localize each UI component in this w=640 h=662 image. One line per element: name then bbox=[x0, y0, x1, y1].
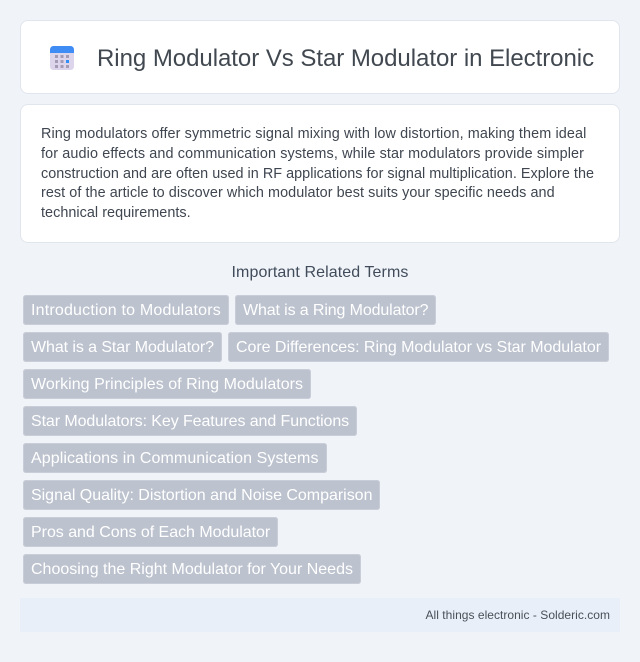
tag bbox=[235, 295, 436, 325]
tag bbox=[23, 443, 327, 473]
title: Ring Modulator Vs Star Modulator in Electronic bbox=[97, 45, 594, 72]
tag bbox=[228, 332, 609, 362]
tag: Choosing the Right Modulator for Your Needs bbox=[31, 561, 353, 578]
tag: Signal Quality: Distortion and Noise Comparison bbox=[31, 487, 372, 504]
tag: Working Principles of Ring Modulators bbox=[31, 376, 303, 393]
intro text block: technical requirements. bbox=[41, 205, 191, 221]
footer credit: All things electronic - Solderic.com bbox=[426, 608, 610, 622]
tag list bbox=[23, 295, 609, 584]
panel: title card bbox=[20, 20, 620, 94]
intro text block: construction and are often used in RF applications for signal multiplication. Explore the bbox=[41, 166, 594, 182]
tag: What is a Ring Modulator? bbox=[243, 302, 428, 319]
tag bbox=[23, 517, 278, 547]
tag: Star Modulators: Key Features and Functions bbox=[31, 413, 349, 430]
tag bbox=[23, 406, 357, 436]
footer bar bbox=[20, 598, 620, 632]
tag: Core Differences: Ring Modulator vs Star Modulator bbox=[236, 339, 601, 356]
intro text block: for audio effects and communication systems, while star modulators provide simpler bbox=[41, 146, 584, 162]
tag: Applications in Communication Systems bbox=[31, 450, 319, 467]
tag bbox=[23, 332, 222, 362]
heading: important related terms: Important Related Terms bbox=[232, 264, 408, 281]
tag bbox=[23, 295, 229, 325]
tag: What is a Star Modulator? bbox=[31, 339, 214, 356]
panel: intro text card bbox=[20, 104, 620, 243]
intro text block: rest of the article to discover which modulator best suits your specific needs and bbox=[41, 185, 555, 201]
intro text block: Ring modulators offer symmetric signal mixing with low distortion, making them ideal bbox=[41, 126, 586, 142]
tag bbox=[23, 480, 380, 510]
intro text block bbox=[41, 126, 594, 221]
tag: Pros and Cons of Each Modulator bbox=[31, 524, 270, 541]
tag bbox=[23, 554, 361, 584]
tag bbox=[23, 369, 311, 399]
tag: Introduction to Modulators bbox=[31, 302, 221, 319]
icon: calendar app bbox=[50, 46, 74, 70]
